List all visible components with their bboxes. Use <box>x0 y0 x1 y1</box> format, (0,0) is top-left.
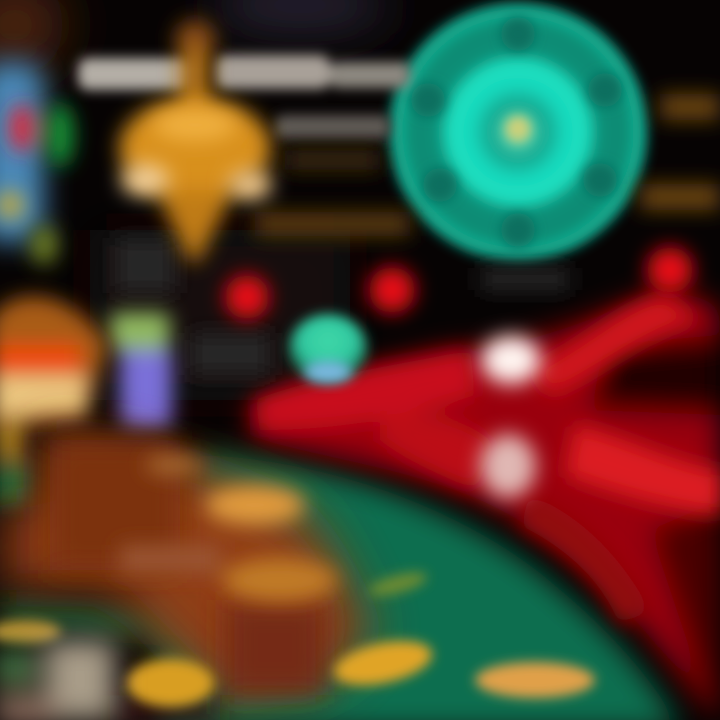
heading: blurred title bar <box>78 55 410 139</box>
icon: red dots <box>225 247 693 319</box>
text block: blurred grey labels <box>115 238 570 375</box>
icon: slot machine left <box>0 62 44 242</box>
icon: teal roulette wheel <box>388 2 648 262</box>
icon: blue ball base <box>304 361 352 383</box>
icon: gold coins <box>0 568 595 707</box>
icon: green ball <box>288 314 368 382</box>
panel: cards lower left <box>0 640 115 720</box>
icon: left gold lamp <box>0 296 108 507</box>
icon: purple slot <box>110 312 172 430</box>
icon: gold ornament <box>119 20 272 262</box>
panel: top backdrop <box>0 0 390 400</box>
icon: slot lights <box>0 103 74 265</box>
text block: blurred gold lines <box>255 94 720 236</box>
icon: white chips <box>480 336 541 498</box>
panel: red sofa <box>250 294 720 720</box>
panel: green table <box>0 455 680 720</box>
panel: coin stacks <box>0 430 375 720</box>
